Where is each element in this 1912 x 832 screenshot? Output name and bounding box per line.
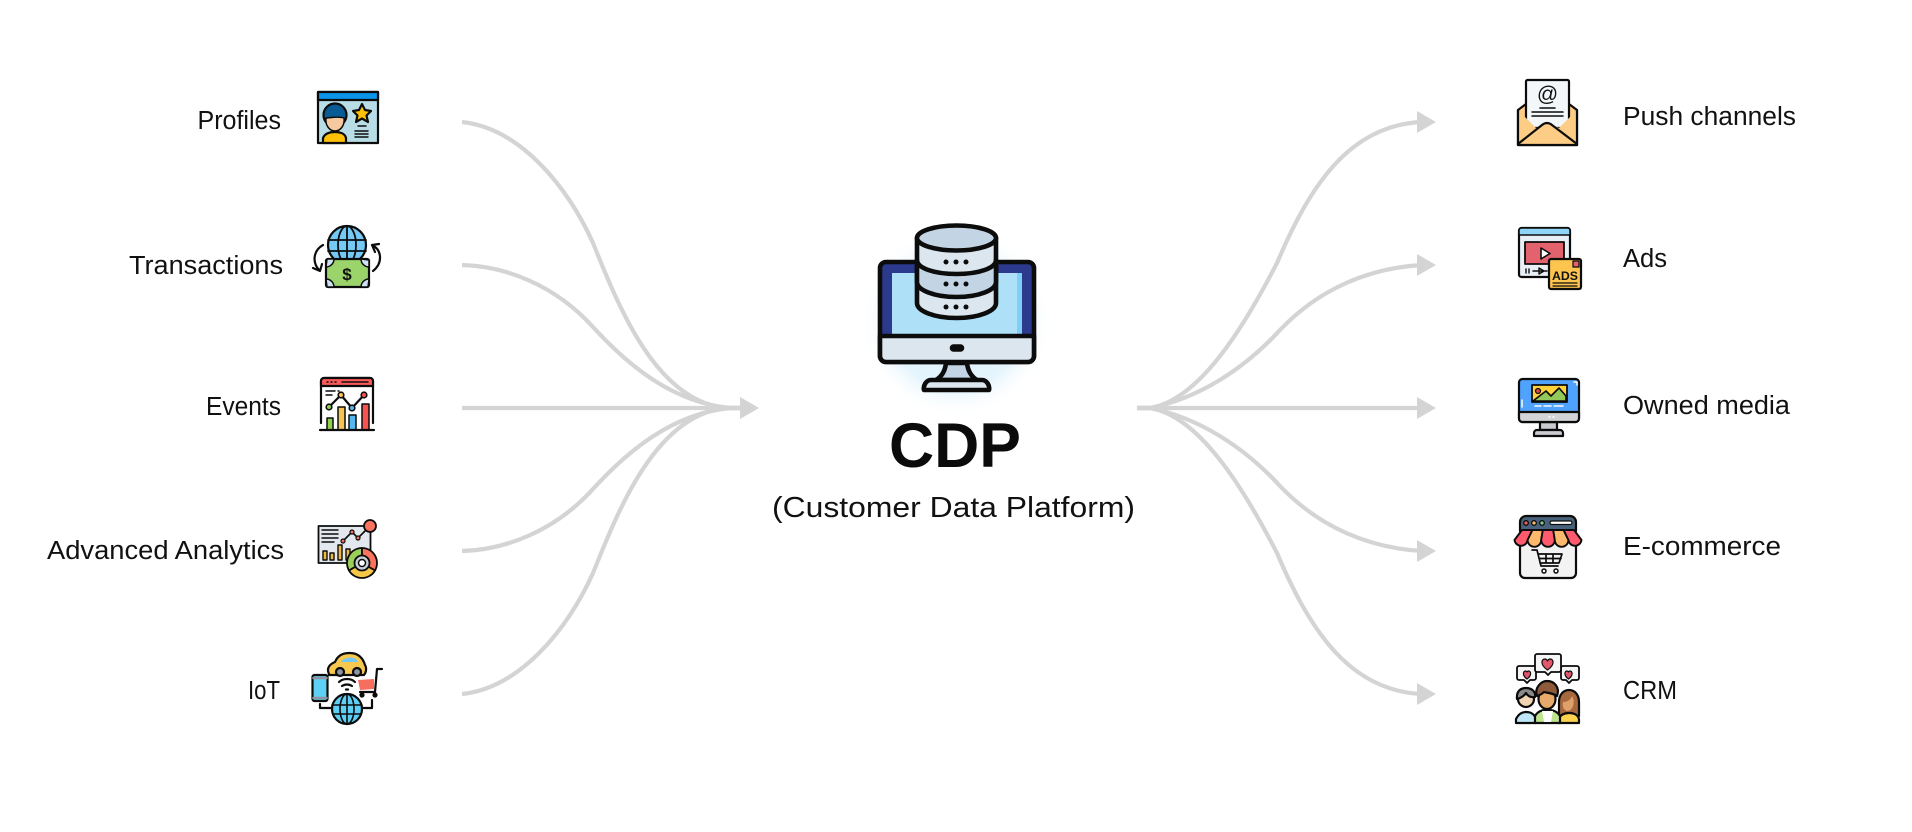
ads tag lines <box>1553 283 1577 286</box>
trend line <box>343 526 370 541</box>
globe lines <box>332 694 362 724</box>
curve: CDP to CRM <box>1137 408 1422 694</box>
car wheels <box>336 668 361 676</box>
label: E-commerce: E-commerce <box>1623 533 1781 561</box>
icon: customer relationships <box>1516 654 1579 723</box>
connector lines <box>320 700 372 708</box>
person middle hair <box>1536 681 1558 696</box>
bars <box>323 545 350 560</box>
base <box>1534 430 1563 436</box>
shopping cart <box>1532 550 1562 566</box>
icon: online store <box>1514 516 1582 578</box>
curve: Profiles to CDP <box>462 122 745 408</box>
car window <box>341 658 358 662</box>
curve: IoT to CDP <box>462 408 745 694</box>
arrowhead: Push channels <box>1417 111 1436 133</box>
wifi symbol <box>339 679 355 690</box>
curve: Events to CDP <box>462 406 745 410</box>
hearts <box>1523 659 1572 679</box>
video controls <box>1526 268 1547 274</box>
icon: video ads <box>1519 228 1581 289</box>
donut: green slice <box>347 548 362 570</box>
title: CDP: CDP <box>889 411 1021 481</box>
database top <box>917 226 996 250</box>
star <box>353 104 371 122</box>
icon: analytics report <box>318 520 377 578</box>
person right face <box>1563 696 1574 711</box>
monitor bottom panel <box>1519 412 1579 422</box>
letter lines <box>1532 108 1563 116</box>
envelope back <box>1518 104 1577 145</box>
store body <box>1520 535 1576 578</box>
globe meridian ellipse <box>340 694 354 724</box>
database dots <box>944 260 968 310</box>
arrow: left cycle <box>313 245 323 271</box>
label: Advanced Analytics: Advanced Analytics <box>47 537 284 565</box>
phone bars <box>314 678 326 698</box>
card window <box>318 92 378 143</box>
text lines <box>326 391 339 395</box>
label: CRM: CRM <box>1623 677 1677 705</box>
icon: globe and money <box>313 226 380 287</box>
left bubble <box>1517 666 1536 683</box>
curve: CDP to Push channels <box>1137 122 1422 408</box>
arrowhead: CRM <box>1417 683 1436 705</box>
bar: yellow <box>338 407 345 430</box>
label: Profiles: Profiles <box>198 107 281 135</box>
trend points <box>341 530 360 543</box>
curve: CDP to Ads <box>1137 265 1422 408</box>
window header <box>321 378 373 386</box>
shopping cart <box>358 679 374 690</box>
curve: CDP to Owned media <box>1137 406 1422 410</box>
stand <box>1540 422 1557 430</box>
arrowhead: into CDP <box>740 397 759 419</box>
card text lines <box>355 126 368 137</box>
curve: Transactions to CDP <box>462 265 745 408</box>
browser header <box>1519 228 1570 235</box>
arrow: right cycle <box>372 244 380 271</box>
globe meridian ellipse <box>338 226 356 264</box>
banknote <box>326 259 369 287</box>
middle bubble <box>1535 654 1561 675</box>
icon: internet of things <box>312 653 382 724</box>
donut: red slice <box>362 548 377 570</box>
globe <box>332 694 362 724</box>
person right hair <box>1559 690 1579 716</box>
label: Transactions: Transactions <box>129 252 283 280</box>
ads tag text: ADS <box>1552 269 1578 283</box>
list lines <box>322 530 338 542</box>
person hair <box>324 104 346 126</box>
window body <box>321 378 373 423</box>
person middle shirt <box>1542 711 1553 722</box>
person left body <box>1516 712 1536 723</box>
arrowhead: Owned media <box>1417 397 1436 419</box>
person left face <box>1518 691 1534 707</box>
curve: CDP to E-commerce <box>1137 408 1422 551</box>
monitor screen <box>892 273 1022 335</box>
bar: blue <box>349 415 356 430</box>
envelope front <box>1518 110 1577 145</box>
monitor bottom panel <box>880 336 1034 362</box>
person right body <box>1558 713 1579 723</box>
arrowhead: Ads <box>1417 254 1436 276</box>
person body <box>323 132 346 143</box>
phone <box>312 675 328 701</box>
icon: email envelope <box>1518 80 1577 145</box>
subtitle: Customer Data Platform: (Customer Data Platform) <box>772 492 1135 524</box>
globe meridians <box>328 226 366 264</box>
ads tag corner <box>1573 261 1579 267</box>
banknote corners <box>326 259 369 287</box>
trend line <box>329 395 364 408</box>
donut hole <box>358 560 366 566</box>
label: Events: Events <box>206 393 281 421</box>
monitor stand base <box>924 380 989 390</box>
monitor stand neck <box>936 363 977 380</box>
car body <box>328 653 366 675</box>
right flow arrows: CDP to outputs <box>1137 111 1436 705</box>
image mountains <box>1533 388 1566 401</box>
person face <box>326 117 344 131</box>
database cylinder <box>917 238 996 318</box>
image frame <box>1532 385 1567 402</box>
monitor screen highlight <box>1017 273 1022 335</box>
awning <box>1514 530 1582 547</box>
monitor body <box>1519 379 1579 422</box>
dollar sign: $ <box>342 265 352 284</box>
label: Ads: Ads <box>1623 245 1667 273</box>
cart wheels <box>360 694 364 696</box>
white details <box>1522 382 1577 417</box>
card header <box>318 92 378 100</box>
glow behind CDP icon <box>860 226 1052 418</box>
cart frame <box>360 669 382 692</box>
envelope flap <box>1518 123 1577 144</box>
monitor button <box>952 346 962 350</box>
curve: Advanced Analytics to CDP <box>462 408 745 551</box>
bar: green <box>327 418 333 430</box>
store header <box>1520 516 1576 531</box>
at sign: @ <box>1537 83 1558 106</box>
header details <box>327 381 368 383</box>
header dots <box>1524 521 1544 525</box>
person left hair <box>1517 688 1535 699</box>
donut: yellow slice <box>349 563 375 578</box>
label: Owned media: Owned media <box>1623 392 1791 420</box>
orange marker <box>364 520 376 532</box>
baseline <box>320 429 374 431</box>
database middle band <box>917 260 996 297</box>
monitor frame <box>880 262 1034 362</box>
cart wheels <box>1542 569 1546 573</box>
image sun <box>1536 388 1540 394</box>
play button <box>1541 248 1550 259</box>
person middle body <box>1535 710 1560 723</box>
report panel <box>318 526 370 563</box>
envelope outline <box>1518 110 1577 145</box>
icon: event dashboard <box>320 378 374 430</box>
ads tag <box>1549 259 1581 289</box>
bar: red <box>362 404 369 430</box>
browser window <box>1519 228 1570 277</box>
person middle face <box>1538 689 1556 709</box>
donut ring <box>354 556 370 570</box>
letter <box>1526 80 1569 128</box>
arrowhead: E-commerce <box>1417 540 1436 562</box>
icon: CDP monitor with database <box>880 226 1034 390</box>
trend points <box>326 392 367 411</box>
left flow arrows: inputs into CDP <box>462 122 759 694</box>
label: IoT: IoT <box>248 677 280 705</box>
header search pill <box>1550 521 1572 524</box>
icon: monitor with image <box>1519 379 1579 436</box>
right bubble <box>1561 666 1579 683</box>
video player <box>1525 242 1564 264</box>
icon: profile card <box>318 92 378 143</box>
label: Push channels: Push channels <box>1623 103 1796 131</box>
globe <box>328 226 366 264</box>
